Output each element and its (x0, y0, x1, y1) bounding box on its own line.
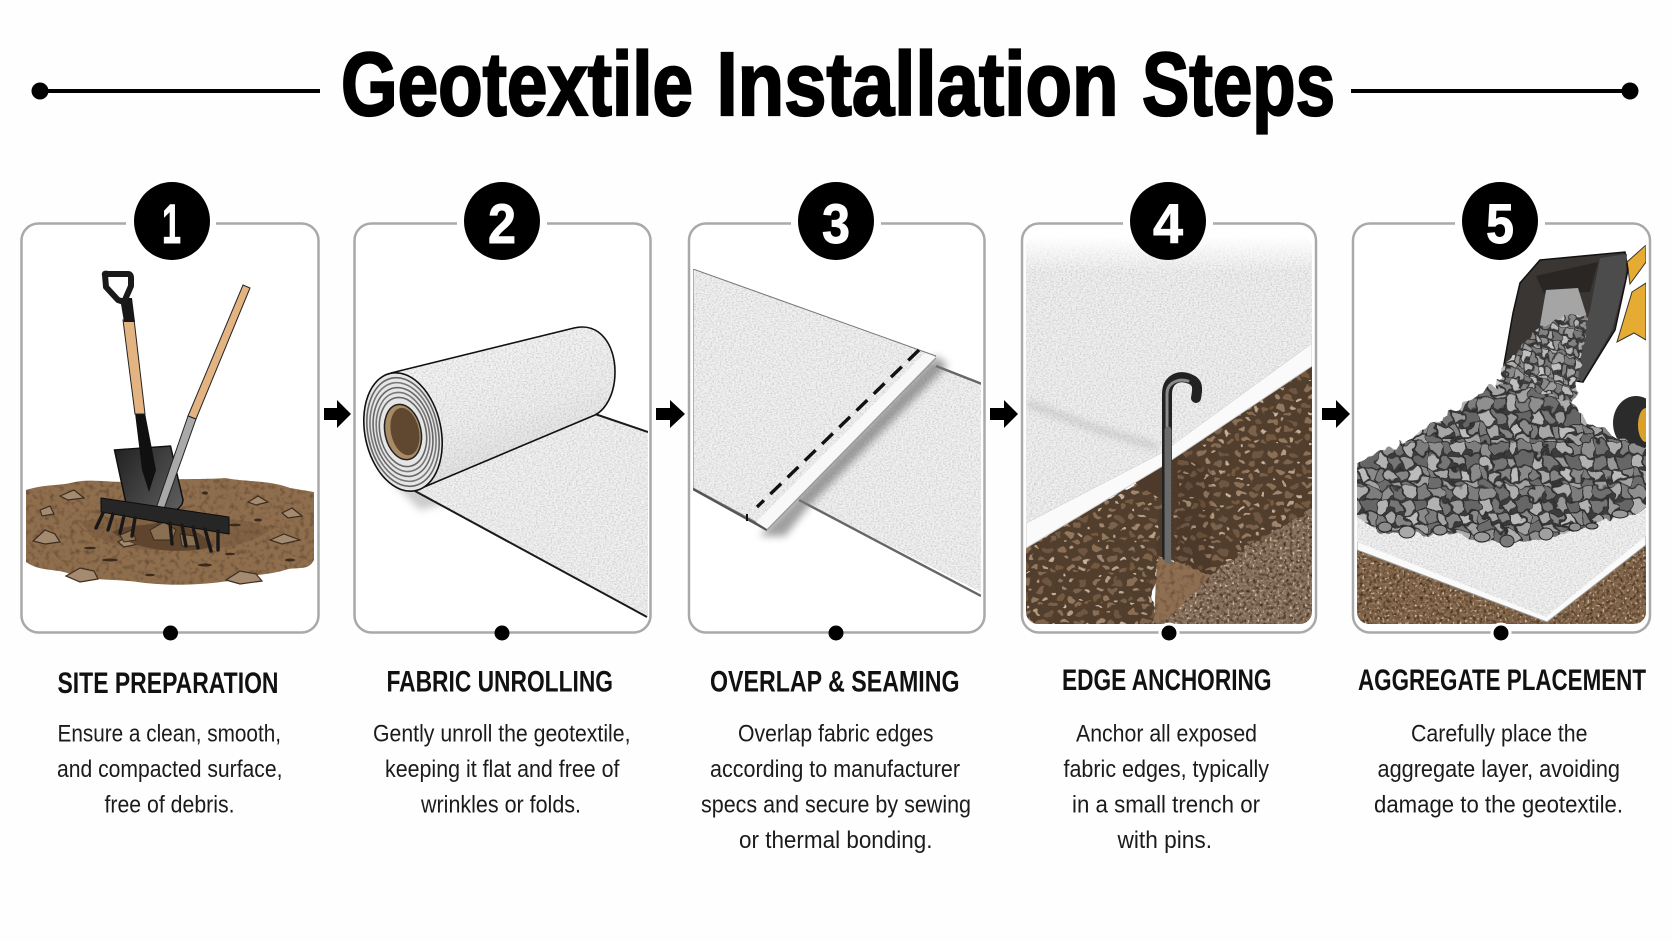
folded seam band (756, 353, 936, 529)
right soil block (1176, 360, 1320, 575)
description (1374, 720, 1623, 818)
description: Anchor all exposed (1076, 720, 1257, 748)
description: or thermal bonding. (739, 827, 932, 854)
ground right of trench (1151, 508, 1312, 624)
left soil block (1020, 485, 1161, 630)
roll end with rings (363, 372, 443, 492)
stitching (757, 350, 919, 507)
title rule left (32, 82, 320, 100)
mound rocks (120, 522, 198, 546)
step badge 1: 1 (162, 192, 181, 255)
description: Overlap fabric edges (738, 720, 934, 748)
arrow 2 (656, 400, 685, 428)
icon: shovel (105, 274, 183, 516)
description: free of debris. (104, 792, 234, 818)
bottom dot 1 (163, 626, 178, 640)
upper sheet lower edge (693, 489, 767, 530)
unrolled sheet (415, 414, 648, 617)
step 3 text (701, 666, 971, 854)
step 4 text (1062, 664, 1272, 854)
bottom dot 2 (494, 626, 510, 640)
card frame 1 (22, 224, 318, 632)
illustration: geotextile roll (353, 327, 648, 617)
step 1 text (57, 667, 282, 818)
fabric fade (1026, 236, 1312, 266)
roll shadow (382, 478, 444, 512)
description: aggregate layer, avoiding (1378, 756, 1620, 783)
dirt mound (112, 520, 214, 551)
step badge 4: 4 (1153, 192, 1183, 255)
step badge 3: 3 (822, 192, 850, 255)
description: Gently unroll the geotextile, (373, 720, 630, 748)
fabric edge band (1026, 343, 1312, 548)
illustration: pinned fabric at trench (1020, 236, 1320, 630)
step badge 2 (457, 182, 547, 260)
panel 4: edge anchoring (1020, 224, 1320, 632)
description: according to manufacturer (710, 756, 960, 783)
excavator wheel (1613, 396, 1646, 448)
panel 1: site preparation (22, 224, 318, 632)
step badge 4 (1123, 182, 1213, 260)
bottom dot 4 (1160, 624, 1178, 642)
ground soil (1357, 546, 1646, 624)
heading: EDGE ANCHORING (1062, 664, 1272, 697)
description (57, 720, 282, 818)
step 5 text (1358, 664, 1646, 818)
excavator arm (1617, 245, 1646, 342)
step badge 5 (1455, 182, 1545, 260)
step 2 text (373, 666, 630, 818)
icon: rake (96, 285, 250, 551)
block corner face (1176, 452, 1212, 575)
gravel bucket (1503, 252, 1628, 382)
illustration: overlapping fabric sheets (693, 269, 982, 596)
gravel stream (1494, 312, 1586, 405)
heading: SITE PREPARATION (58, 667, 278, 700)
fabric sheet (1357, 508, 1646, 617)
description (373, 720, 630, 818)
card frame 2 (354, 224, 650, 632)
illustration: shovel, rake and soil (26, 274, 314, 585)
title: Geotextile (341, 35, 693, 135)
description: Ensure a clean, smooth, (58, 720, 281, 748)
description (701, 720, 971, 854)
description: damage to the geotextile. (1374, 792, 1623, 818)
fold shadow (760, 356, 948, 536)
title: Installation (716, 35, 1118, 135)
foreground stones (1378, 510, 1628, 547)
card frame 5 (1353, 224, 1650, 632)
step badge 5: 5 (1486, 192, 1514, 255)
sheet edge (415, 414, 648, 617)
stitch tick (746, 514, 748, 521)
title rule right (1351, 82, 1638, 100)
description: specs and secure by sewing (701, 792, 971, 818)
soil rocks (33, 490, 302, 584)
fabric crease (1026, 403, 1157, 447)
trench floor (1154, 556, 1211, 622)
description: fabric edges, typically (1064, 756, 1269, 783)
illustration: gravel poured on fabric (1350, 245, 1659, 624)
step badge 1 (126, 182, 216, 260)
arrow 1 (324, 400, 351, 428)
description: in a small trench or (1072, 792, 1260, 818)
soil patch (26, 478, 314, 585)
gravel pile (1350, 384, 1655, 545)
description: wrinkles or folds. (420, 792, 581, 818)
description: with pins. (1117, 827, 1212, 854)
card frame 4 (1022, 224, 1316, 632)
soil shading (80, 516, 270, 550)
card frame 3 (689, 224, 984, 632)
roll body (391, 327, 615, 490)
heading: OVERLAP & SEAMING (710, 666, 960, 698)
bottom dot 3 (828, 626, 844, 640)
description: Carefully place the (1411, 720, 1588, 748)
bottom dot 5 (1492, 624, 1510, 642)
dark soil specks (84, 491, 295, 576)
panel 3: overlap and seaming (689, 224, 984, 632)
trench back wall (1135, 450, 1180, 562)
heading: FABRIC UNROLLING (386, 666, 613, 698)
description: and compacted surface, (57, 756, 282, 783)
description: keeping it flat and free of (385, 756, 620, 783)
fabric surface (1026, 236, 1312, 523)
description (1064, 720, 1269, 854)
lower sheet edges (799, 366, 982, 596)
icon: anchor pin (1167, 377, 1197, 560)
title: Steps (1142, 35, 1335, 135)
roll outline (391, 327, 615, 490)
step badge 3 (791, 182, 881, 260)
title (341, 35, 1335, 135)
step badge 2: 2 (488, 192, 516, 255)
fabric sheet edge (1357, 535, 1646, 622)
lower sheet (790, 364, 982, 592)
panel 5: aggregate placement (1350, 224, 1659, 632)
panel 2: fabric unrolling (353, 224, 650, 632)
arrow 4 (1322, 400, 1350, 428)
arrow 3 (990, 400, 1018, 428)
upper sheet (693, 269, 936, 528)
seam fold line (767, 358, 936, 530)
